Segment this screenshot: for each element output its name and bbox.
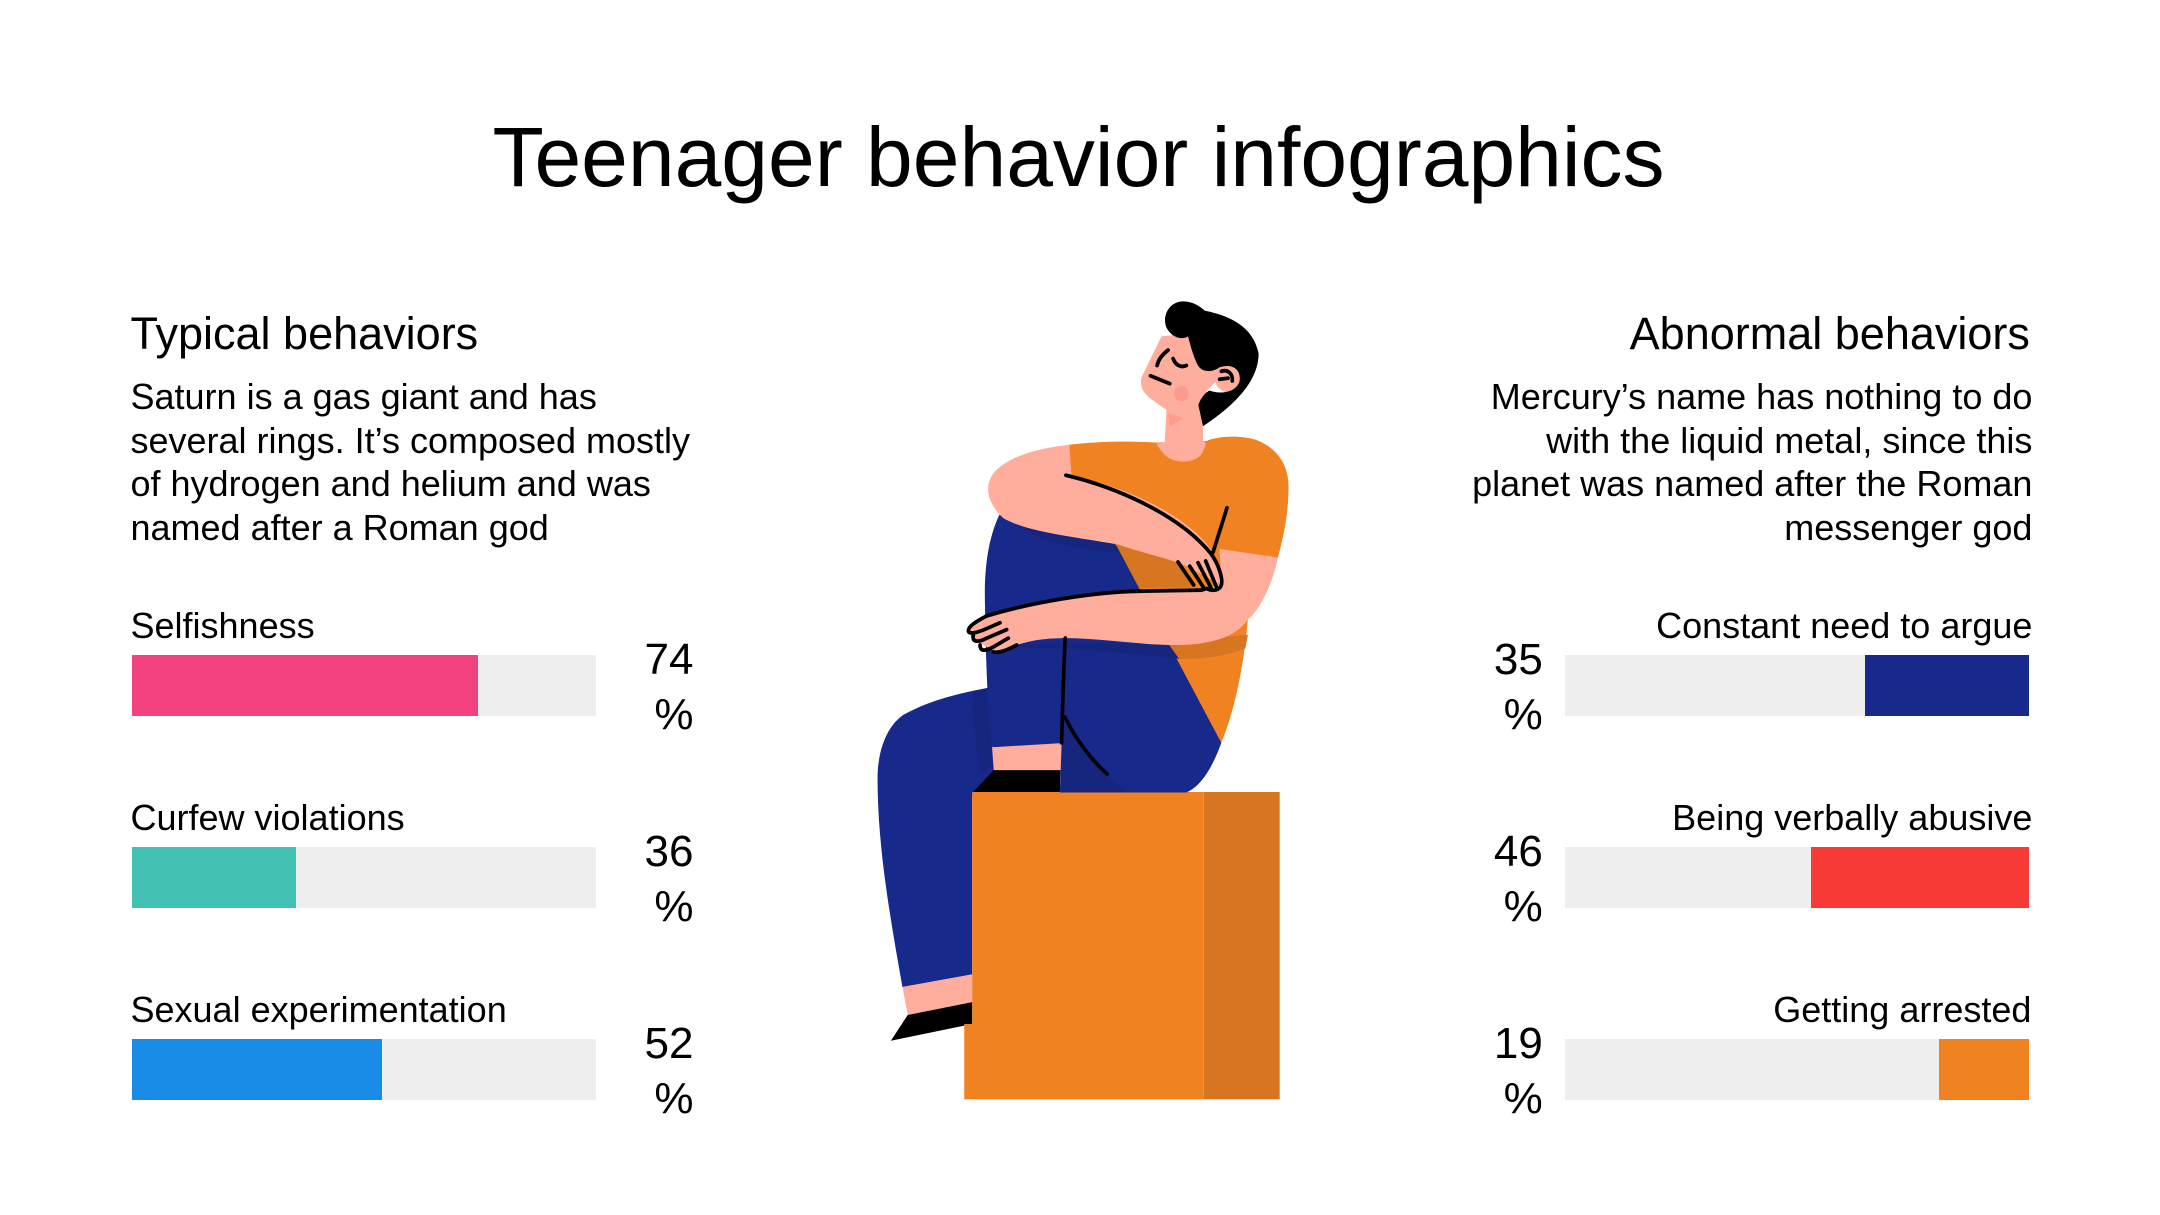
value: 74%: % xyxy=(654,690,694,739)
arm and hand lines xyxy=(968,475,1227,774)
face xyxy=(1141,333,1230,419)
title: Teenager behavior infographics xyxy=(492,110,1665,204)
back leg xyxy=(878,688,995,1041)
label: being verbally abusive: Being verbally abusive xyxy=(1672,796,2032,838)
text: typical description: several rings. It’s composed mostly xyxy=(130,420,690,461)
text: typical description: named after a Roman god xyxy=(130,507,549,548)
shirt xyxy=(1069,437,1289,743)
panel: abnormal behaviors xyxy=(1472,308,2032,1123)
value: 36%: 36 xyxy=(645,827,694,876)
value: 52%: % xyxy=(654,1074,694,1123)
value: 36% xyxy=(645,827,694,931)
value: 19% xyxy=(1494,1019,1543,1123)
box xyxy=(964,792,1280,1099)
leg shadows xyxy=(1010,522,1179,793)
cheek xyxy=(1174,386,1189,401)
value: 52%: 52 xyxy=(645,1019,694,1068)
value: 36%: % xyxy=(654,882,694,931)
text: abnormal description: planet was named after the Roman xyxy=(1472,463,2032,504)
value: 52% xyxy=(645,1019,694,1123)
figure upper body xyxy=(968,301,1289,793)
front leg xyxy=(985,515,1221,793)
text: abnormal description: Mercury’s name has nothing to do xyxy=(1491,376,2032,417)
heading: abnormal behaviors: Abnormal behaviors xyxy=(1630,308,2030,358)
neck shadow xyxy=(1168,414,1184,426)
label: constant need to argue: Constant need to argue xyxy=(1656,604,2032,646)
value: 74%: 74 xyxy=(645,635,694,684)
value: 46%: % xyxy=(1504,882,1543,931)
value: 35% xyxy=(1494,635,1543,739)
face lines xyxy=(1150,350,1232,384)
text: typical description xyxy=(130,376,690,548)
value: 35%: 35 xyxy=(1494,635,1543,684)
value: 46% xyxy=(1494,827,1543,931)
text: abnormal description xyxy=(1472,376,2032,548)
bar: being verbally abusive 46% xyxy=(1565,847,2029,908)
front foot xyxy=(972,742,1061,793)
label: selfishness: Selfishness xyxy=(130,604,315,646)
arms xyxy=(988,445,1221,585)
text: abnormal description: with the liquid metal, since this xyxy=(1546,420,2032,461)
text: typical description: of hydrogen and helium and was xyxy=(130,463,651,504)
panel: typical behaviors xyxy=(130,308,694,1123)
label: getting arrested: Getting arrested xyxy=(1773,988,2031,1030)
value: 19%: 19 xyxy=(1494,1019,1543,1068)
hair xyxy=(1165,301,1259,426)
ear xyxy=(1215,366,1241,392)
bar: constant need to argue 35% xyxy=(1565,655,2029,716)
bar: sexual experimentation 52% xyxy=(132,1039,596,1100)
label: sexual experimentation: Sexual experimentation xyxy=(130,988,507,1030)
value: 35%: % xyxy=(1504,690,1543,739)
shirt shadows xyxy=(1115,544,1248,659)
neck xyxy=(1156,410,1206,462)
heading: typical behaviors: Typical behaviors xyxy=(130,308,478,358)
value: 46%: 46 xyxy=(1494,827,1543,876)
bar: selfishness 74% xyxy=(132,655,596,716)
value: 19%: % xyxy=(1504,1074,1543,1123)
bar: getting arrested 19% xyxy=(1565,1039,2029,1100)
text: typical description: Saturn is a gas giant and has xyxy=(130,376,597,417)
value: 74% xyxy=(645,635,694,739)
text: abnormal description: messenger god xyxy=(1784,507,2032,548)
bar: curfew violations 36% xyxy=(132,847,596,908)
label: curfew violations: Curfew violations xyxy=(130,796,405,838)
